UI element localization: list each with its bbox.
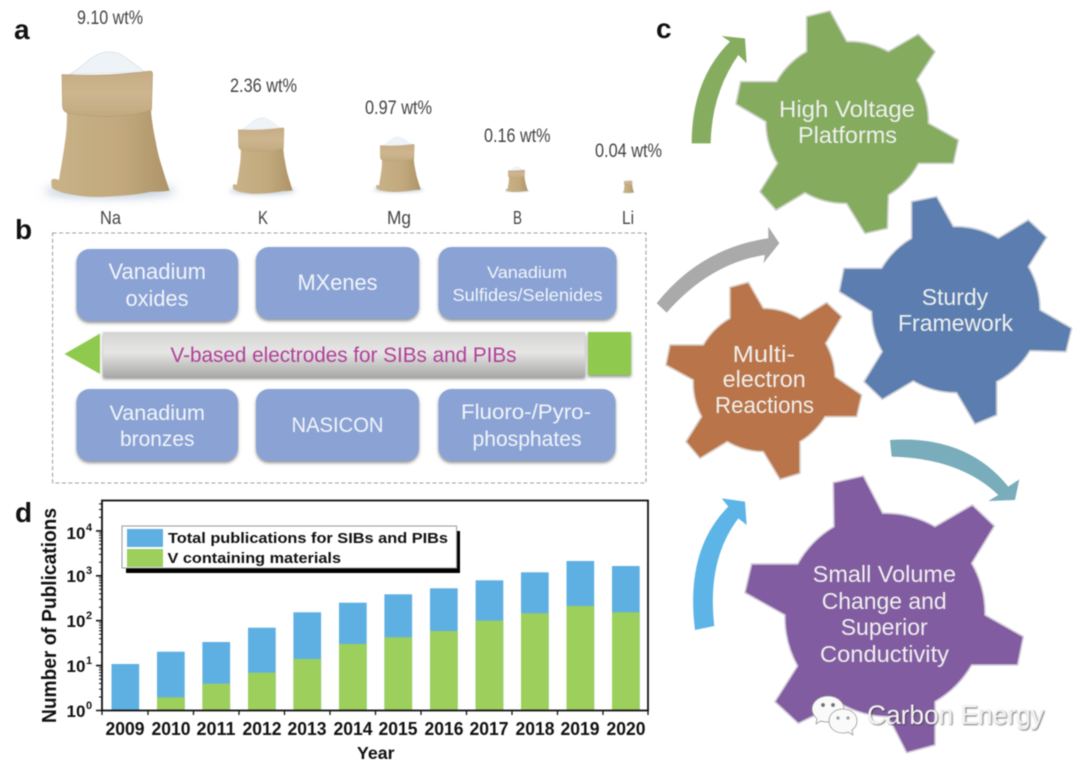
gear: Sturdy Framework: Sturdy [922, 284, 989, 310]
element labels: B [513, 207, 522, 228]
value labels: 0.97 wt% [365, 98, 432, 119]
y axis tick labels: 10 [66, 567, 85, 586]
value labels: 0.04 wt% [595, 141, 662, 162]
x axis year labels: 2013 [288, 719, 326, 739]
box: Vanadium oxides: oxides [126, 286, 188, 311]
panel c: property gears [656, 11, 1072, 753]
value labels: 2.36 wt% [230, 76, 297, 97]
panel b: V-based electrode families [15, 214, 646, 483]
x axis year labels: 2016 [424, 719, 464, 739]
banner arrowhead [64, 334, 100, 374]
y axis tick labels: 1 [86, 655, 92, 667]
gear: High Voltage Platforms: High Voltage [779, 96, 915, 122]
element labels: K [258, 207, 269, 228]
x axis year labels: 2015 [378, 719, 418, 739]
x axis year labels: 2012 [242, 719, 282, 739]
value labels: 0.16 wt% [484, 126, 551, 147]
box: MXenes [256, 247, 419, 319]
x axis year labels [106, 719, 646, 739]
sack: K [229, 118, 296, 194]
arrow: green [692, 36, 747, 143]
arrow: teal [890, 440, 1019, 501]
x axis year labels: 2018 [516, 719, 554, 739]
panel label c: c [656, 13, 672, 44]
box: Vanadium Sulfides/Selenides: Vanadium [487, 263, 567, 282]
element labels: Na [100, 207, 122, 228]
gear: Small Volume Change and Superior Conductivity: Superior [841, 614, 928, 640]
y axis tick labels: 10 [66, 524, 85, 543]
gear: Multi-electron Reactions: electron [723, 366, 806, 392]
gear: Small Volume Change and Superior Conductivity [745, 476, 1023, 753]
stacked bars [112, 561, 640, 711]
x axis year labels: 2010 [152, 719, 190, 739]
gear: Multi-electron Reactions: Reactions [715, 392, 814, 418]
arrow: light blue [693, 498, 747, 630]
banner end block [588, 332, 631, 375]
x axis year labels: 2011 [196, 719, 236, 739]
value labels [77, 8, 662, 162]
legend [122, 526, 460, 573]
total publication bars [112, 561, 640, 710]
x axis title: Year [357, 743, 395, 763]
x axis year labels: 2019 [560, 719, 600, 739]
x axis year labels: 2020 [606, 719, 646, 739]
box: Vanadium oxides: Vanadium [108, 259, 206, 284]
sack: Mg [373, 137, 423, 192]
gear: Sturdy Framework [839, 197, 1072, 424]
x axis year labels: 2017 [470, 719, 508, 739]
legend: V containing materials [168, 550, 341, 567]
y axis tick labels: 2 [86, 610, 92, 622]
panel a: elemental abundance sacks [14, 8, 662, 228]
watermark: Carbon Energy [812, 696, 1044, 735]
y axis title: Number of Publications [38, 508, 61, 723]
box: Vanadium bronzes [77, 389, 238, 461]
gear: Small Volume Change and Superior Conductivity: Change and [822, 588, 947, 614]
y axis tick labels: 10 [66, 702, 85, 721]
panel label b: b [15, 214, 32, 245]
V-containing bars [157, 606, 640, 711]
element labels: Mg [387, 207, 411, 228]
dashed frame [53, 233, 646, 483]
panel label a: a [14, 14, 30, 45]
y axis tick labels: 4 [86, 522, 93, 534]
box: Fluoro-/Pyro-phosphates: phosphates [472, 428, 582, 451]
value labels: 9.10 wt% [77, 8, 143, 29]
gear: High Voltage Platforms: Platforms [798, 122, 897, 148]
central banner [64, 332, 631, 377]
axes frame and ticks [96, 500, 648, 715]
gear: Sturdy Framework: Framework [898, 310, 1013, 336]
panel label d: d [15, 497, 32, 528]
arrow: gray [657, 227, 779, 313]
panel d: publications bar chart [15, 497, 648, 763]
gear: Small Volume Change and Superior Conductivity: Conductivity [820, 641, 950, 667]
box: Vanadium Sulfides/Selenides [438, 247, 616, 319]
sack: Li [622, 179, 634, 193]
legend: Total publications for SIBs and PIBs [168, 530, 448, 547]
gear: Small Volume Change and Superior Conductivity: Small Volume [813, 561, 956, 587]
x axis year labels: 2014 [334, 719, 372, 739]
watermark text: Carbon Energy [867, 700, 1044, 730]
box: Vanadium Sulfides/Selenides: Sulfides/Selenides [452, 285, 603, 305]
box: Fluoro-/Pyro-phosphates [438, 389, 616, 461]
y axis tick labels: 10 [66, 657, 85, 676]
banner text: V-based electrodes for SIBs and PIBs [170, 343, 516, 367]
sack: Na [44, 52, 176, 197]
box: NASICON: NASICON [292, 414, 384, 437]
x axis year labels: 2009 [106, 719, 144, 739]
y axis tick labels: 10 [66, 612, 85, 631]
y axis tick labels [66, 522, 93, 721]
sack: B [505, 167, 529, 192]
box: Fluoro-/Pyro-phosphates: Fluoro-/Pyro- [461, 401, 591, 424]
icon: chat bubbles [812, 696, 857, 735]
box: NASICON [256, 389, 419, 461]
y axis tick labels: 0 [86, 700, 92, 712]
gear: High Voltage Platforms [736, 11, 958, 233]
banner bar [103, 332, 585, 377]
gear: Multi-electron Reactions: Multi- [733, 341, 795, 367]
element labels: Li [622, 207, 634, 228]
box: Vanadium bronzes: Vanadium [110, 402, 205, 425]
box: Vanadium oxides [77, 249, 238, 321]
box: MXenes: MXenes [298, 270, 378, 295]
gear: Multi-electron Reactions [666, 282, 862, 479]
box: Vanadium bronzes: bronzes [120, 428, 194, 451]
element labels [100, 207, 634, 228]
y axis tick labels: 3 [86, 565, 92, 577]
